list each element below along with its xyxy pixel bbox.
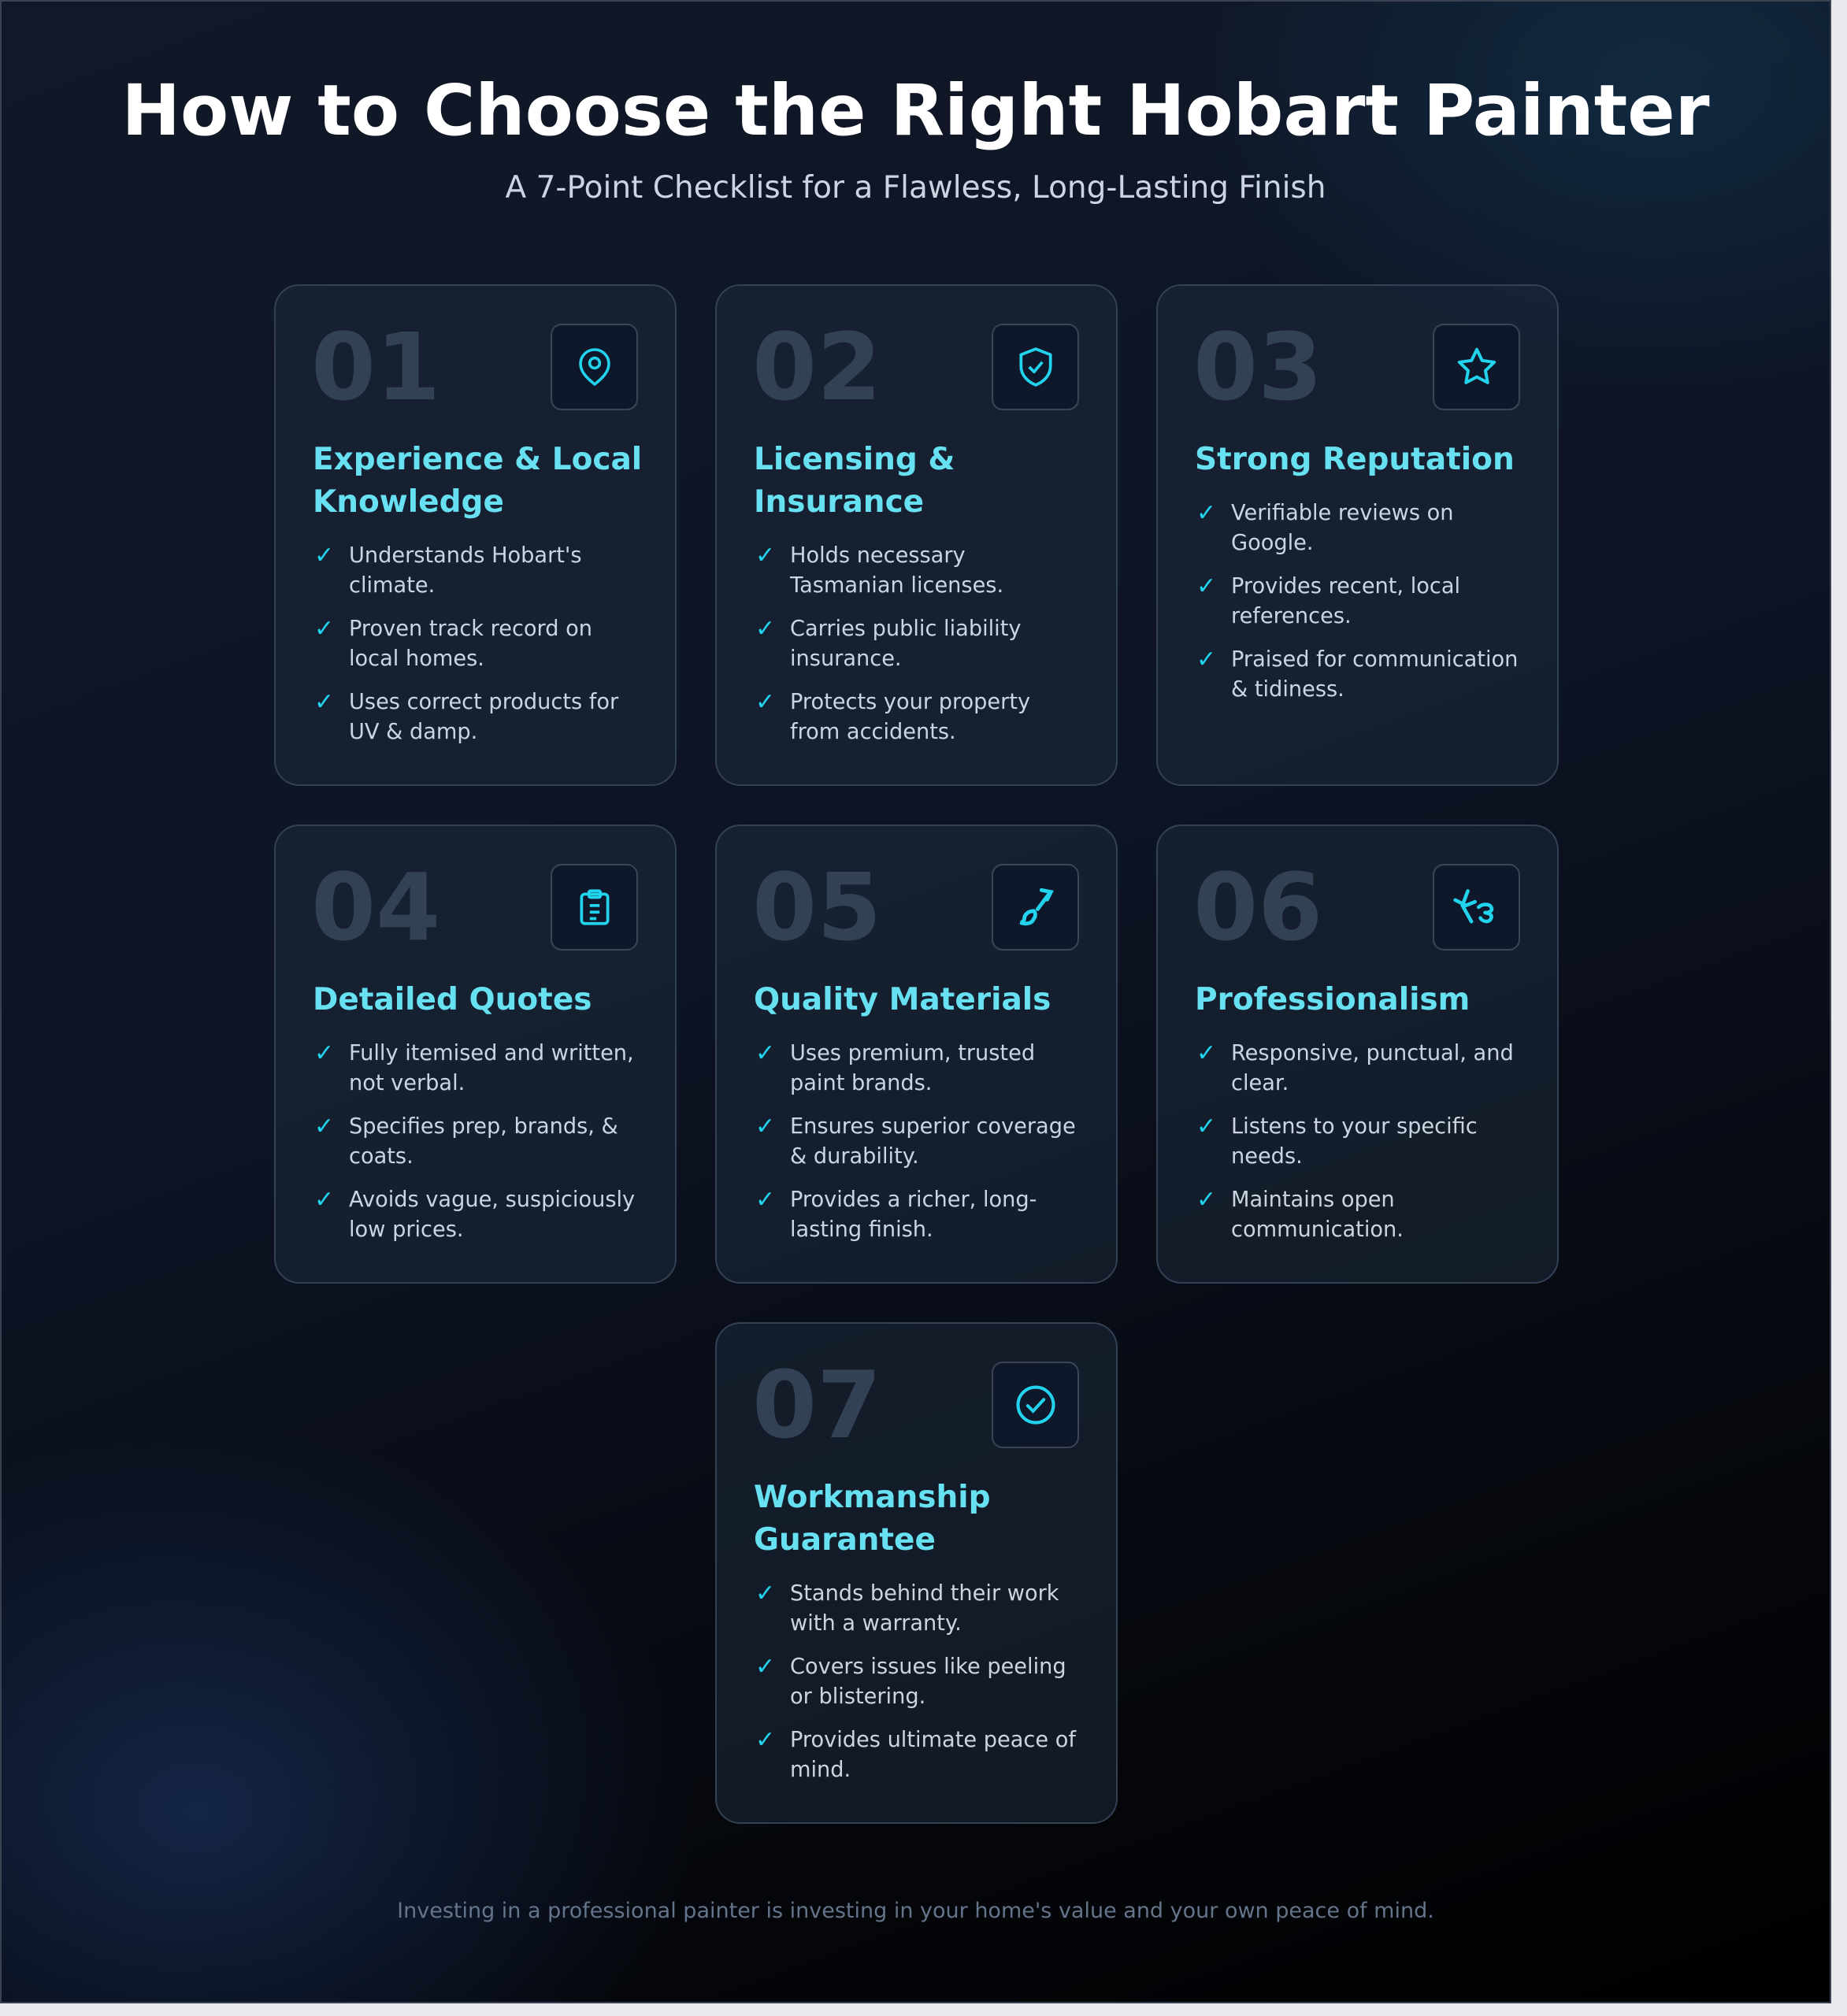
checklist: Provides recent, local references.: [1231, 574, 1460, 628]
checklist: Ensures superior coverage & durability.: [790, 1114, 1076, 1169]
checklist: [318, 1041, 635, 1242]
panel: 03 reputation: [1156, 284, 1559, 786]
checklist: Uses premium, trusted paint brands.: [790, 1041, 1035, 1095]
heading: Professionalism: [1195, 982, 1470, 1017]
number 05: 05: [752, 853, 881, 962]
checklist: Protects your property from accidents.: [790, 690, 1030, 744]
number 01: 01: [311, 313, 440, 421]
checklist: Provides a richer, long-lasting finish.: [790, 1188, 1037, 1242]
checklist: Provides ultimate peace of mind.: [790, 1728, 1076, 1782]
checklist: Maintains open communication.: [1231, 1188, 1404, 1242]
checklist: Uses correct products for UV & damp.: [349, 690, 618, 744]
checklist: Proven track record on local homes.: [349, 617, 592, 671]
panel: 06 professionalism: [1156, 825, 1559, 1284]
icon: map pin: [551, 324, 638, 410]
icon: shield: [992, 324, 1079, 410]
heading: Detailed Quotes: [313, 982, 592, 1017]
checklist: Holds necessary Tasmanian licenses.: [790, 543, 1003, 598]
title: How to Choose the Right Hobart Painter: [121, 69, 1710, 151]
number 06: 06: [1193, 853, 1322, 962]
panel: 01 experience: [274, 284, 677, 786]
number 02: 02: [752, 313, 881, 421]
checklist: Understands Hobart's climate.: [349, 543, 582, 598]
checklist: [318, 543, 619, 744]
number 04: 04: [311, 853, 440, 962]
heading: Licensing & Insurance: [754, 442, 955, 520]
checklist: Fully itemised and written, not verbal.: [349, 1041, 634, 1095]
checklist: [759, 1581, 1076, 1782]
checklist: Stands behind their work with a warranty.: [790, 1581, 1059, 1636]
panel: 02 licensing: [715, 284, 1118, 786]
number 03: 03: [1193, 313, 1322, 421]
subtitle: A 7-Point Checklist for a Flawless, Long-Lasting Finish: [506, 170, 1326, 206]
heading: Quality Materials: [754, 982, 1051, 1017]
checklist: [759, 1041, 1076, 1242]
icon: brush: [992, 864, 1079, 951]
panel: 07 guarantee: [715, 1322, 1118, 1824]
icon: handshake: [1433, 864, 1520, 951]
icon: clipboard: [551, 864, 638, 951]
checklist: Avoids vague, suspiciously low prices.: [349, 1188, 635, 1242]
checklist: Responsive, punctual, and clear.: [1231, 1041, 1514, 1095]
checklist: Listens to your specific needs.: [1231, 1114, 1478, 1169]
checklist: Praised for communication & tidiness.: [1231, 647, 1518, 702]
panel: 05 materials: [715, 825, 1118, 1284]
checklist: Specifies prep, brands, & coats.: [349, 1114, 618, 1169]
footer text: Investing in a professional painter is investing in your home's value and your own peace of mind.: [397, 1899, 1434, 1923]
heading: Workmanship Guarantee: [754, 1480, 991, 1558]
checklist: Verifiable reviews on Google.: [1231, 501, 1454, 555]
checklist: Carries public liability insurance.: [790, 617, 1021, 671]
number 07: 07: [752, 1351, 881, 1459]
checklist: Covers issues like peeling or blistering.: [790, 1655, 1066, 1709]
heading: Experience & Local Knowledge: [313, 442, 642, 520]
panel: 04 quotes: [274, 825, 677, 1284]
icon: star: [1433, 324, 1520, 410]
checklist: [1200, 501, 1518, 702]
checklist: [759, 543, 1030, 744]
icon: check circle: [992, 1362, 1079, 1448]
checklist: [1200, 1041, 1514, 1242]
heading: Strong Reputation: [1195, 442, 1515, 477]
